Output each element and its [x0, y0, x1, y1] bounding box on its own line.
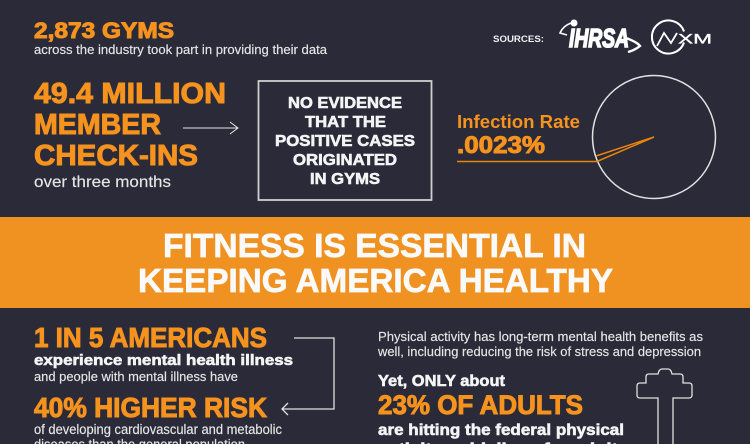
- banner: FITNESS IS ESSENTIAL IN: [163, 227, 586, 264]
- stat: member check-ins: [34, 78, 226, 191]
- stat: gyms: across the industry took part in providing their data: [34, 43, 327, 57]
- callout: no evidence: [258, 81, 432, 200]
- banner: [0, 217, 750, 308]
- text block: mental illness stats: of developing cardiovascular and metabolic: [34, 422, 282, 437]
- callout: no evidence: POSITIVE CASES: [275, 133, 415, 150]
- icon: dumbbell: [637, 369, 692, 444]
- text block: physical activity: Yet, ONLY about: [378, 373, 505, 390]
- stat: infection rate: Infection Rate: [457, 112, 580, 132]
- text block: mental illness stats: and people with mental illness have: [34, 369, 238, 384]
- banner: KEEPING AMERICA HEALTHY: [138, 262, 613, 299]
- logo: MXM: [652, 21, 712, 54]
- text block: physical activity: are hitting the federal physical: [378, 422, 624, 439]
- arrow: check-ins to evidence box: [183, 122, 238, 134]
- stat: gyms: 2,873 GYMS: [34, 18, 174, 43]
- text block: physical activity: [377, 329, 703, 444]
- pie chart: infection rate: [457, 76, 716, 198]
- callout: no evidence: IN GYMS: [310, 171, 380, 188]
- text block: mental illness stats: 1 IN 5 AMERICANS: [34, 322, 267, 353]
- callout: no evidence: NO EVIDENCE: [288, 95, 402, 112]
- stat: infection rate: .0023%: [457, 132, 545, 159]
- text block: physical activity: well, including reducing the risk of stress and depression: [377, 344, 701, 359]
- stat: member check-ins: over three months: [34, 174, 171, 191]
- stat: member check-ins: CHECK-INS: [34, 140, 198, 172]
- sources label: SOURCES:: [493, 34, 544, 45]
- logo: IHRSA: IHRSA: [569, 23, 629, 53]
- text block: physical activity: Physical activity has long-term mental health benefits as: [378, 329, 703, 344]
- text block: mental illness stats: [34, 322, 293, 444]
- callout: no evidence: ORIGINATED: [293, 152, 397, 169]
- callout: no evidence: THAT THE: [305, 114, 386, 131]
- text block: mental illness stats: 40% HIGHER RISK: [34, 392, 267, 423]
- text block: physical activity: 23% OF ADULTS: [378, 390, 583, 420]
- stat: member check-ins: 49.4 MILLION: [34, 78, 226, 110]
- logo: MXM: XM: [678, 30, 712, 46]
- arrow: bracket to higher risk: [282, 338, 334, 415]
- stat: infection rate: [457, 112, 580, 159]
- stat: gyms: [34, 18, 327, 57]
- text block: mental illness stats: experience mental health illness: [34, 352, 293, 369]
- stat: member check-ins: MEMBER: [34, 109, 161, 141]
